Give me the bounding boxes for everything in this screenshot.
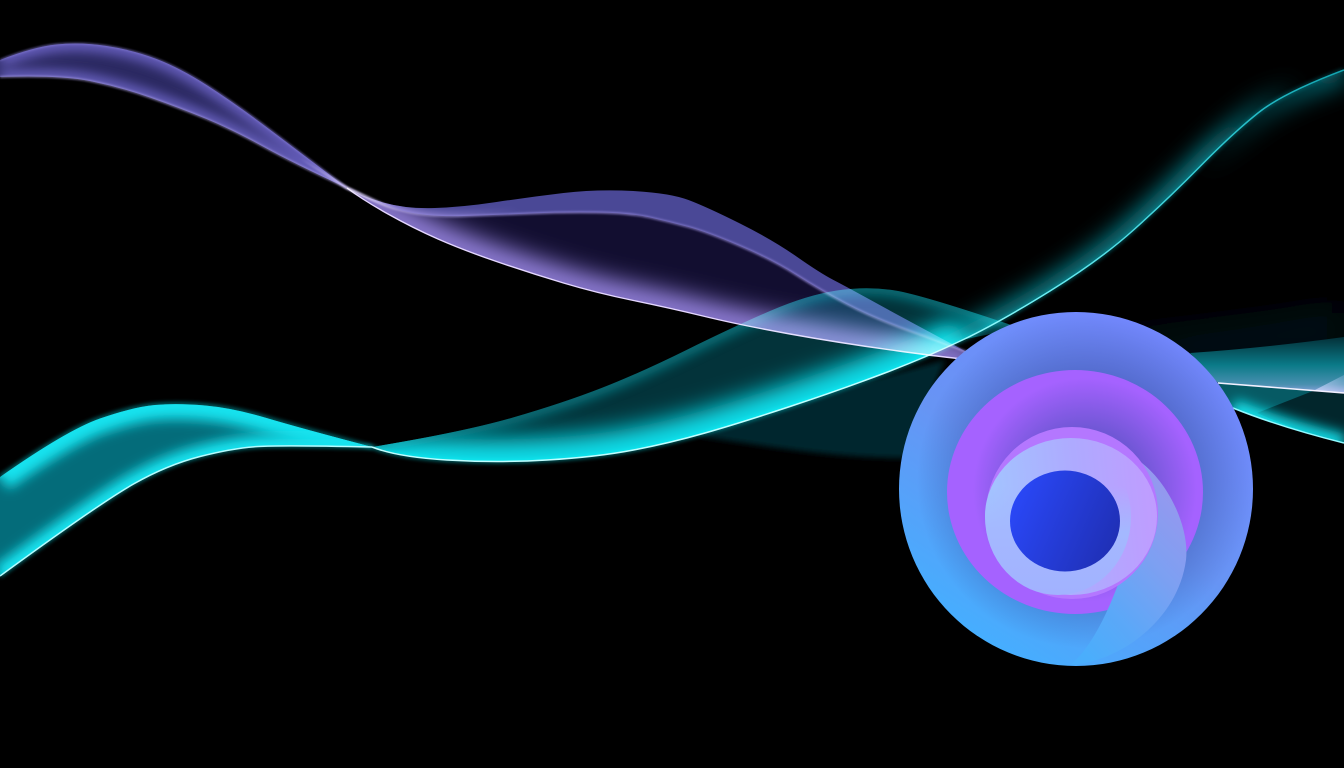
outer disc bbox=[899, 312, 1253, 666]
ribbon: purple, lavender upper panel bbox=[347, 188, 967, 352]
ribbon: purple, left section bbox=[0, 44, 400, 212]
purple disc bbox=[947, 370, 1203, 614]
ribbon: right bright edges bbox=[1218, 375, 1344, 443]
ribbon: purple, dark inner panel bbox=[347, 188, 975, 360]
pale ring bbox=[985, 438, 1157, 595]
inner pale crescent bbox=[985, 439, 1131, 595]
ribbon: cyan edge rising to top right bbox=[372, 70, 1344, 462]
ribbon: right teal section bbox=[1040, 310, 1344, 443]
ribbon: cyan, centre section bbox=[372, 288, 1020, 462]
ribbon: cyan, left section bbox=[0, 404, 372, 576]
blue core bbox=[1010, 470, 1120, 572]
swirl overlay bbox=[1070, 457, 1186, 665]
concentric circle emblem bbox=[899, 312, 1253, 666]
ribbon: faint lower teal shadow bbox=[697, 360, 945, 458]
light purple disc bbox=[986, 427, 1158, 599]
ribbon: right dark wedge bbox=[1257, 391, 1344, 443]
